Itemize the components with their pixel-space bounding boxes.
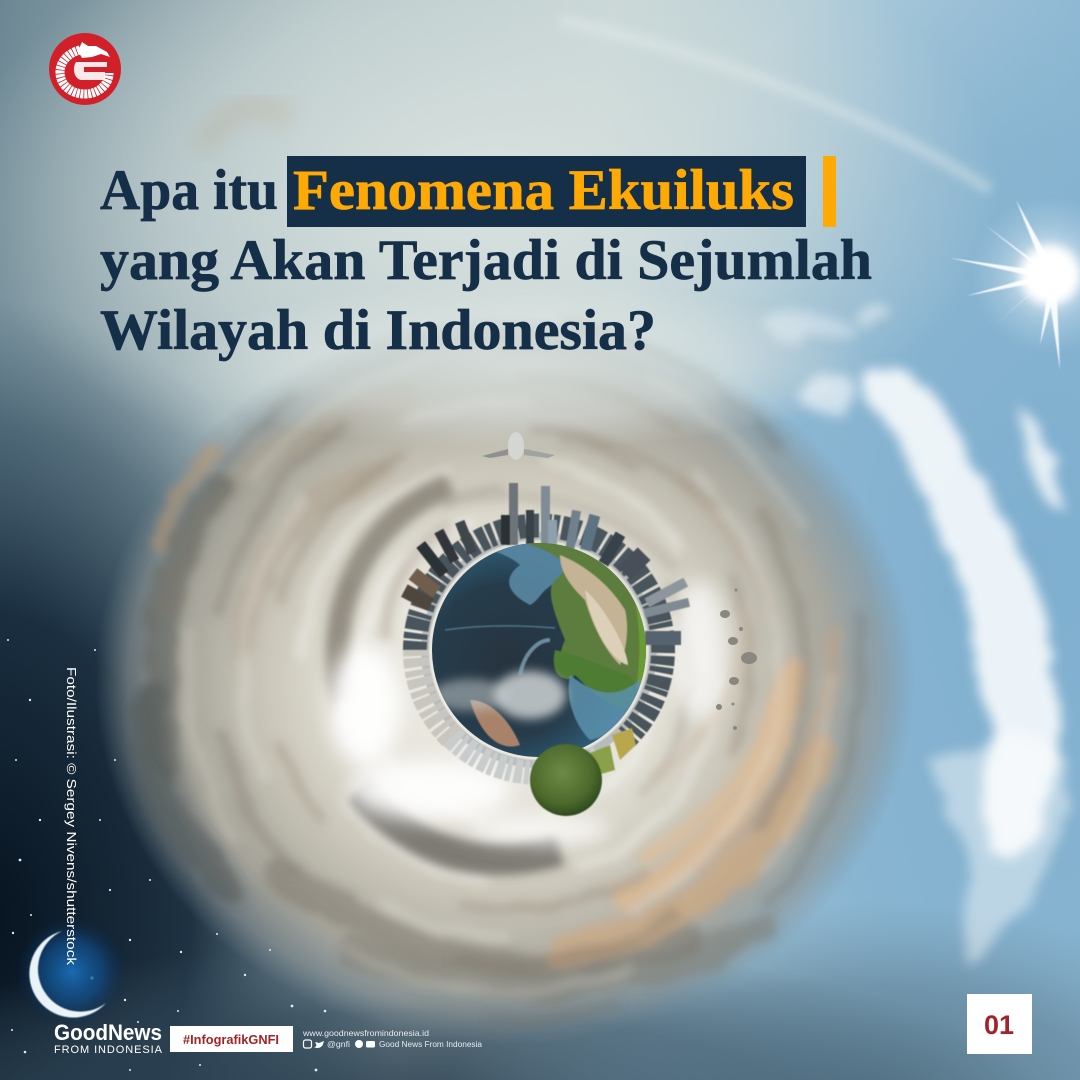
title: Fenomena Ekuiluks: [293, 159, 794, 222]
title highlight box: [287, 156, 806, 227]
clouds on right: [770, 306, 1070, 960]
title: yang Akan Terjadi di Sejumlah: [100, 229, 872, 292]
crescent moon: [16, 916, 128, 1028]
logo badge: [49, 33, 121, 105]
footer brand: #InfografikGNFI: [183, 1033, 279, 1047]
sun starburst: [950, 195, 1080, 370]
cursor bar: [823, 156, 836, 227]
hashtag: [170, 1026, 293, 1052]
footer brand: FROM INDONESIA: [54, 1044, 163, 1056]
concentric streaks: [160, 320, 860, 1020]
title: Apa itu: [100, 159, 278, 222]
floating rocks: [716, 588, 757, 730]
footer brand: GoodNews: [54, 1020, 162, 1045]
inner dark brown ring: [338, 430, 775, 860]
plane: [482, 432, 555, 460]
title: Wilayah di Indonesia?: [100, 299, 656, 362]
tree cluster: [530, 728, 636, 816]
illustration: planet with city: [401, 432, 757, 816]
stars and space dust: [7, 639, 326, 1071]
page number: 01: [984, 1010, 1014, 1040]
page number: [967, 994, 1032, 1054]
web and social: www.goodnewsfromindonesia.id: [302, 1028, 429, 1038]
footer brand: Good News From Indonesia: [379, 1040, 483, 1049]
globe: [432, 538, 648, 757]
white inner haze: [329, 580, 728, 844]
footer brand: [54, 1020, 483, 1056]
footer brand: @gnfi: [327, 1040, 350, 1049]
title: [100, 156, 872, 362]
photo credit: Foto/Ilustrasi: © Sergey Nivens/shutterstock: [64, 667, 79, 966]
skyline: [401, 483, 690, 773]
